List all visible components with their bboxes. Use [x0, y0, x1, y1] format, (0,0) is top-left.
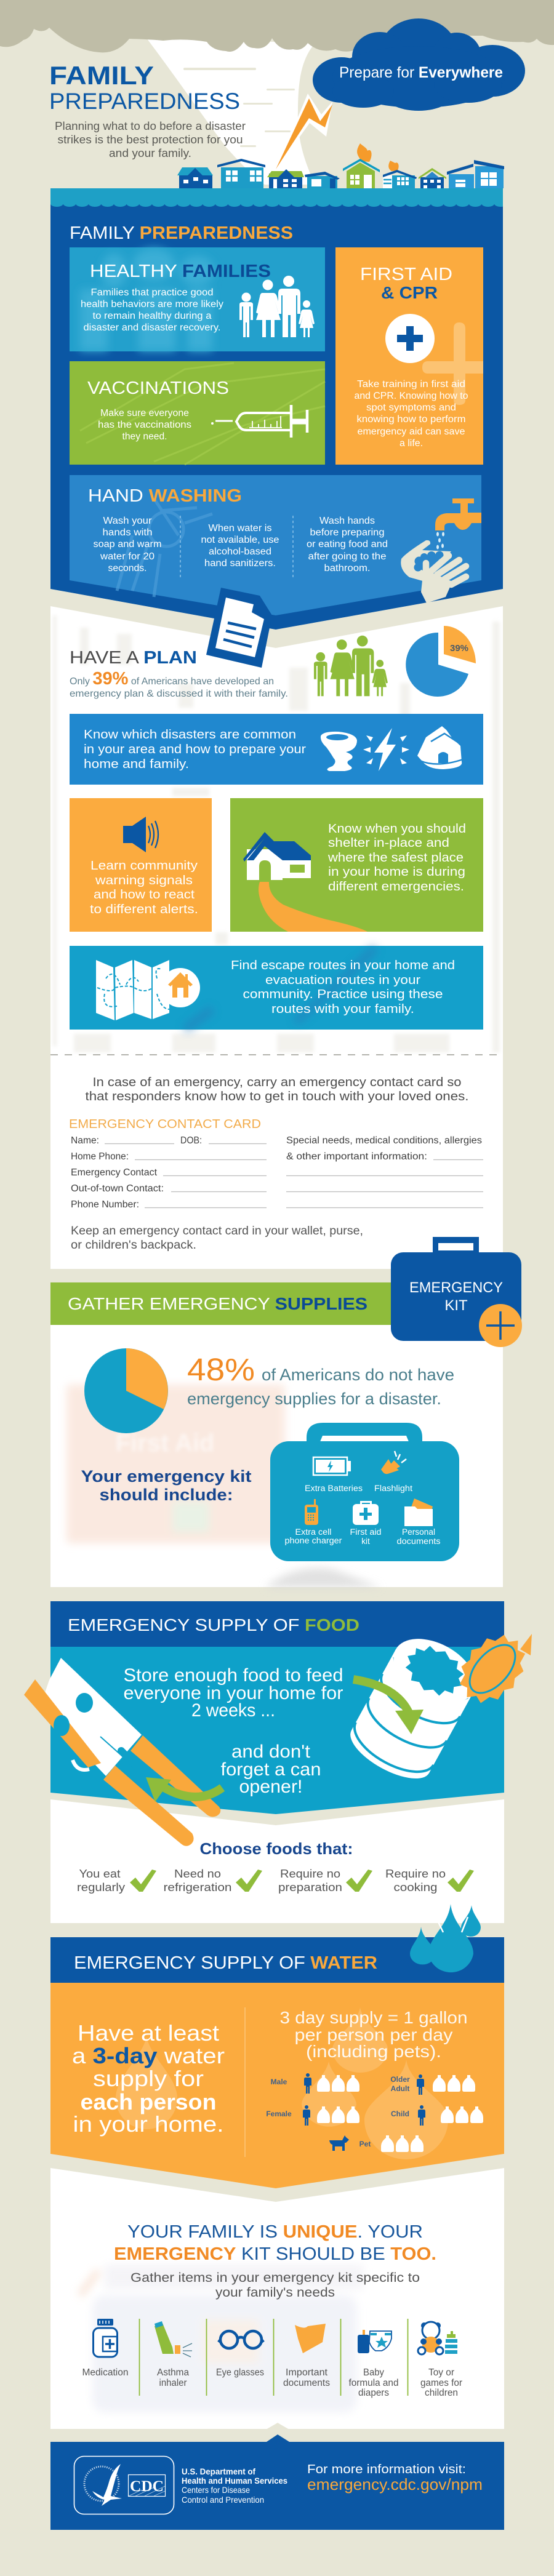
panel: shelter in place: different emergencies.	[328, 880, 464, 894]
house 2	[217, 159, 265, 190]
panel: first aid and cpr: Take training in first aid	[357, 379, 465, 390]
icon: phone	[305, 1499, 318, 1525]
text: keep card: or children's backpack.	[71, 1239, 196, 1252]
icon: supply kit bag: Extra cell	[295, 1527, 331, 1537]
panel: vaccinations: they need.	[122, 431, 167, 442]
panel: emergency supply of food: Store enough food to feed	[123, 1665, 343, 1686]
logo: hhs and cdc	[74, 2457, 174, 2514]
icon: house and path	[243, 832, 367, 932]
list: family kit items	[82, 2319, 462, 2398]
heading: your family is unique: EMERGENCY KIT SHOULD BE TOO.	[114, 2244, 436, 2264]
divider: dashed cut line	[50, 1054, 503, 1055]
faded first aid box	[66, 1385, 382, 1588]
cloud: prepare for everywhere	[313, 18, 525, 111]
panel: emergency supply of water: EMERGENCY SUPPLY OF WATER	[74, 1953, 377, 1973]
panel: escape routes: community. Practice using these	[243, 988, 443, 1001]
house 5 with fire	[343, 143, 399, 188]
panel: hand washing: alcohol-based	[209, 546, 271, 557]
icon: can opener	[24, 1658, 222, 1846]
panel: emergency supply of water: per person per day	[294, 2025, 453, 2044]
panel: escape routes: routes with your family.	[271, 1002, 414, 1016]
panel: healthy families: disaster and disaster recovery.	[84, 322, 220, 333]
list: food checks: preparation	[278, 1881, 342, 1894]
panel: hand washing: When water is	[208, 523, 272, 534]
panel: family preparedness	[50, 188, 503, 630]
chart: water per person: Pet	[359, 2140, 371, 2148]
list: family kit items: Medication	[82, 2367, 128, 2378]
panel: first aid and cpr: emergency aid can save	[357, 426, 465, 437]
text: more information: emergency.cdc.gov/npm	[307, 2475, 483, 2494]
panel: food choices white	[50, 1799, 504, 1923]
stat: 48 percent: of Americans do not have	[262, 1366, 454, 1384]
panel: emergency supply of food	[50, 1601, 504, 1814]
icon: emergency kit case: EMERGENCY	[409, 1279, 503, 1296]
list: family kit items: diapers	[358, 2388, 389, 2398]
title	[49, 61, 240, 114]
panel: healthy families: Families that practice good	[91, 287, 213, 298]
panel: hand washing: Wash hands	[319, 516, 375, 526]
cloud: prepare for everywhere: Prepare for Everywhere	[339, 64, 503, 81]
panel: shelter in place	[230, 798, 483, 932]
notch in white panel	[266, 2423, 289, 2430]
pie chart: 39 percent	[406, 626, 476, 697]
panel: hand washing: HAND WASHING	[88, 486, 242, 506]
panel: hand washing: after going to the	[308, 551, 387, 562]
pie chart: 48 percent	[84, 1348, 168, 1433]
panel: vaccinations: Make sure everyone	[100, 408, 189, 418]
text: your emergency kit: should include:	[100, 1486, 233, 1504]
logo: hhs and cdc: CDC	[130, 2478, 164, 2495]
panel: warning signals: Learn community	[90, 859, 198, 873]
panel: emergency supply of water: (including pets).	[306, 2042, 441, 2061]
form: emergency contact card: Emergency Contact	[71, 1167, 158, 1178]
house 1	[177, 167, 213, 188]
text: your emergency kit	[81, 1467, 252, 1504]
chart: water per person: Child	[391, 2110, 409, 2118]
text: gather items: your family's needs	[215, 2286, 335, 2300]
list: food checks: regularly	[77, 1881, 125, 1894]
icon: speaker	[123, 817, 158, 852]
list: family kit items: Eye glasses	[216, 2367, 264, 2378]
icon: flashlight	[381, 1451, 406, 1474]
list: family kit items: Important	[286, 2367, 328, 2378]
cream band under blue chevron and white plan panel	[50, 606, 503, 1269]
form: emergency contact card: Special needs, medical conditions, allergies	[286, 1135, 482, 1146]
form: emergency contact card: Name:	[71, 1135, 99, 1146]
icon: dog	[329, 2135, 349, 2151]
icon: emergency kit case: KIT	[444, 1297, 468, 1314]
text: more information: For more information visit:	[307, 2463, 466, 2476]
panel: emergency supply of water	[50, 1937, 504, 2188]
panel: emergency supply of food: and don't	[231, 1742, 311, 1762]
panel: hand washing: not available, use	[201, 535, 279, 545]
list: food checks: Require no	[280, 1868, 340, 1880]
icon: battery	[313, 1457, 351, 1475]
text: your emergency kit: Your emergency kit	[81, 1467, 252, 1486]
icon: syringe	[212, 405, 307, 438]
icon: lightning bolt	[276, 94, 332, 170]
panel: first aid and cpr: FIRST AID	[360, 265, 452, 284]
panel: know which disasters: Know which disasters are common	[84, 728, 296, 742]
faded cross	[422, 322, 483, 405]
chart: water per person: Older	[390, 2075, 410, 2084]
panel: gather supplies	[50, 1282, 503, 1588]
list: family kit items: Baby	[363, 2367, 384, 2378]
chart: water per person: Adult	[391, 2084, 409, 2093]
panel: healthy families: health behaviors are more likely	[81, 299, 223, 310]
intro text	[55, 120, 246, 159]
chart: water per person	[266, 2073, 483, 2152]
heading: your family is unique: YOUR FAMILY IS UNIQUE . YOUR	[127, 2222, 423, 2242]
icon: supply kit bag: First aid	[350, 1527, 382, 1537]
panel: first aid and cpr: spot symptoms and	[366, 402, 456, 413]
panel: healthy families: to remain healthy during a	[92, 311, 212, 321]
panel: warning signals: to different alerts.	[90, 903, 198, 916]
panel: warning signals	[70, 798, 212, 932]
icon: plus circle	[385, 314, 435, 363]
icon: asthma inhaler	[155, 2321, 192, 2357]
stat: 48 percent: emergency supplies for a disaster.	[187, 1390, 441, 1408]
icon: supply kit bag: Personal	[402, 1527, 435, 1537]
faded kit background	[80, 2265, 363, 2412]
faint streaks	[53, 615, 500, 1052]
list: food checks: cooking	[394, 1881, 437, 1894]
text: agency name: Health and Human Services	[182, 2476, 287, 2486]
icon: family	[239, 276, 315, 337]
list: family kit items: Toy or	[428, 2367, 454, 2378]
intro text: and your family.	[109, 147, 191, 159]
text: gather items	[130, 2271, 420, 2300]
panel: hand washing: Wash your	[103, 516, 151, 526]
panel: know which disasters: home and family.	[84, 758, 189, 771]
form: emergency contact card: Phone Number:	[71, 1199, 139, 1210]
icon: toy	[418, 2322, 457, 2354]
panel: vaccinations	[70, 361, 325, 465]
pie chart: 39 percent: 39%	[450, 643, 468, 654]
header: sky and tornado	[0, 0, 554, 185]
panel: water choices white	[50, 2168, 504, 2429]
text: agency name	[182, 2466, 287, 2505]
icon: hands and faucet	[401, 498, 481, 603]
panel: emergency supply of water: each person	[80, 2089, 217, 2114]
panel: hand washing: soap and warm	[94, 539, 161, 550]
panel: gather supplies: GATHER EMERGENCY SUPPLIES	[68, 1294, 367, 1313]
icon: supply kit bag: phone charger	[284, 1536, 342, 1545]
heading: have a plan: HAVE A PLAN	[70, 648, 197, 668]
panel: healthy families: HEALTHY FAMILIES	[90, 262, 271, 281]
icon: plan document	[206, 588, 272, 668]
panel: shelter in place: shelter in-place and	[328, 836, 449, 850]
panel: emergency supply of food: opener!	[239, 1777, 303, 1797]
stat: 39 percent: emergency plan & discussed it with their family.	[70, 689, 288, 699]
house 3	[267, 169, 304, 188]
panel: know which disasters	[70, 714, 483, 785]
panel: hand washing: hands with	[102, 527, 153, 538]
list: family kit items: formula and	[348, 2378, 399, 2388]
text: keep card: Keep an emergency contact card in your wallet, purse,	[71, 1225, 363, 1238]
panel: vaccinations: has the vaccinations	[98, 420, 191, 430]
icon: supply kit bag	[270, 1423, 459, 1561]
title: FAMILY	[49, 61, 154, 90]
icon: baby formula and diapers	[358, 2330, 391, 2353]
icon: supply kit bag: Extra Batteries	[305, 1484, 363, 1493]
panel: warning signals: warning signals	[95, 874, 193, 887]
stat: 39 percent	[70, 669, 288, 699]
text: more information	[307, 2463, 483, 2494]
panel: emergency supply of water: 3 day supply = 1 gallon	[279, 2008, 468, 2027]
text: agency name: U.S. Department of	[182, 2466, 255, 2476]
list: food checks: Require no	[385, 1868, 446, 1880]
form: emergency contact card: Home Phone:	[71, 1151, 129, 1162]
panel: first aid and cpr: & CPR	[381, 283, 438, 302]
list: food checks: You eat	[79, 1868, 121, 1880]
panel: hand washing: seconds.	[108, 563, 147, 574]
panel: first aid and cpr: knowing how to perform	[357, 414, 465, 425]
text: keep card	[71, 1225, 363, 1252]
panel: hand washing: before preparing	[310, 527, 384, 538]
text: agency name: Control and Prevention	[182, 2495, 264, 2505]
icon: eye glasses	[219, 2331, 263, 2348]
title: PREPAREDNESS	[49, 89, 240, 114]
text: emergency contact card intro: In case of an emergency, carry an emergency contact card so	[92, 1076, 462, 1089]
panel: hand washing	[70, 475, 481, 615]
panel: shelter in place: in your home is during	[328, 865, 465, 879]
panel: emergency supply of food: 2 weeks ...	[191, 1700, 275, 1721]
icon: lightning	[363, 728, 409, 771]
heading: your family is unique	[114, 2222, 436, 2264]
text: emergency contact card intro	[85, 1076, 469, 1103]
icon: tornado	[321, 732, 357, 771]
icon: medication	[94, 2319, 117, 2357]
footer	[50, 2434, 504, 2530]
house 8	[447, 160, 504, 188]
chart: water per person: Female	[266, 2110, 292, 2118]
list: food checks	[77, 1868, 474, 1894]
panel: emergency supply of water: in your home.	[73, 2111, 224, 2137]
panel: emergency supply of food: everyone in your home for	[123, 1683, 343, 1703]
icon: flooded house	[417, 726, 463, 769]
panel: shelter in place: Know when you should	[328, 822, 466, 836]
icon: important documents	[295, 2324, 326, 2353]
stat: 48 percent: 48%	[187, 1352, 255, 1387]
icon: emergency kit case	[391, 1237, 522, 1347]
panel: know which disasters: in your area and how to prepare your	[84, 743, 306, 756]
icon: green family	[314, 636, 388, 696]
panel: emergency supply of food: EMERGENCY SUPPLY OF FOOD	[68, 1615, 359, 1634]
stat: 48 percent	[187, 1352, 454, 1408]
panel: emergency supply of food: forget a can	[220, 1759, 321, 1780]
panel: first aid and cpr: and CPR. Knowing how to	[355, 391, 468, 401]
list: family kit items: children	[425, 2388, 458, 2398]
panel: hand washing: hand sanitizers.	[204, 558, 276, 569]
panel: escape routes	[70, 946, 483, 1030]
house 7	[419, 168, 446, 188]
panel: shelter in place: where the safest place	[327, 851, 464, 865]
panel: first aid and cpr: a life.	[399, 438, 423, 449]
form: emergency contact card	[69, 1118, 483, 1210]
list: food checks: refrigeration	[164, 1881, 231, 1894]
list: family kit items: Asthma	[157, 2367, 189, 2378]
arrow: to can	[353, 1679, 424, 1734]
icon: tin can and lid	[342, 1622, 539, 1789]
form: emergency contact card: DOB:	[180, 1135, 202, 1146]
icon: supply kit bag: Flashlight	[374, 1484, 412, 1493]
panel: emergency supply of water: Have at least	[78, 2020, 219, 2046]
panel: hand washing: bathroom.	[324, 563, 371, 574]
icon: supply kit bag: documents	[396, 1537, 441, 1546]
panel: hand washing: or eating food and	[307, 539, 388, 550]
panel: emergency supply of water: a 3-day water	[72, 2043, 225, 2068]
form: emergency contact card: Out-of-town Contact:	[71, 1183, 164, 1194]
text: choose foods that: Choose foods that:	[199, 1839, 353, 1858]
panel: escape routes: evacuation routes in your	[265, 974, 420, 987]
icon: supply kit bag: kit	[361, 1537, 370, 1546]
intro text: Planning what to do before a disaster	[55, 120, 246, 132]
panel: hand washing: water for 20	[100, 551, 155, 562]
icon: row of houses	[177, 143, 504, 190]
panel: vaccinations: VACCINATIONS	[87, 378, 229, 398]
intro text: strikes is the best protection for you	[58, 134, 243, 146]
house 4	[305, 172, 340, 188]
arrow: to can opener	[146, 1777, 222, 1802]
panel: gather supplies: First Aid	[116, 1430, 214, 1457]
list: family kit items: documents	[283, 2378, 330, 2388]
text: emergency contact card intro: that responders know how to get in touch with your loved ones.	[85, 1090, 469, 1103]
list: food checks: Need no	[174, 1868, 221, 1880]
list: family kit items: inhaler	[159, 2378, 187, 2388]
list: family kit items: games for	[420, 2378, 462, 2388]
house 6	[383, 170, 417, 188]
panel: escape routes: Find escape routes in your home and	[231, 959, 455, 972]
panel: emergency supply of water: supply for	[93, 2066, 204, 2091]
icon: map with house	[96, 960, 200, 1020]
panel: healthy families	[70, 247, 325, 351]
icon: first aid kit	[353, 1501, 379, 1525]
stat: 39 percent: Only 39% of Americans have developed an	[70, 669, 274, 689]
text: gather items: Gather items in your emergency kit specific to	[130, 2271, 420, 2285]
form: emergency contact card: & other important information:	[286, 1151, 427, 1162]
icon: folder	[404, 1498, 433, 1526]
icon: water drops	[410, 1904, 481, 1972]
panel: warning signals: and how to react	[94, 888, 195, 902]
panel: first aid and cpr	[335, 247, 483, 465]
text: agency name: Centers for Disease	[182, 2485, 250, 2495]
chart: water per person: Male	[271, 2078, 287, 2086]
form: emergency contact card: EMERGENCY CONTACT CARD	[69, 1118, 261, 1131]
heading: family preparedness: FAMILY PREPAREDNESS	[70, 223, 293, 243]
